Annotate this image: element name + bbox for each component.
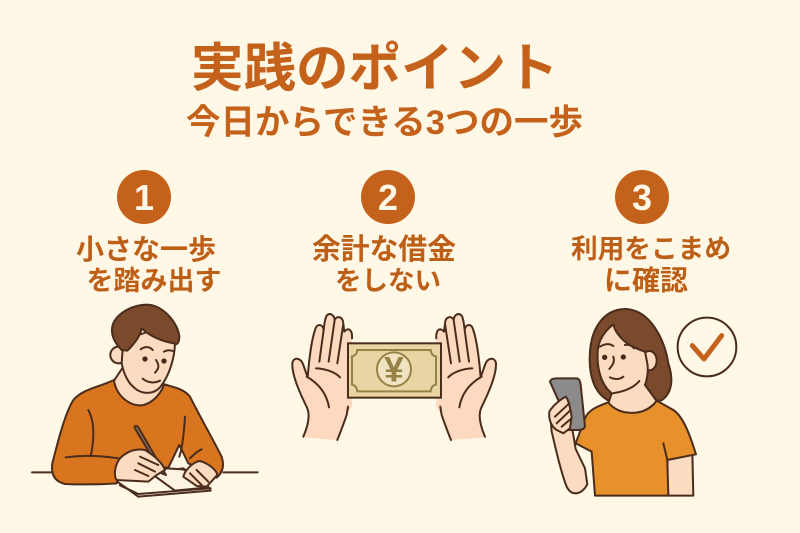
step 3 label [571, 234, 731, 296]
title: 実践のポイント [191, 39, 559, 98]
illustration: man writing in a notebook [32, 305, 258, 497]
banknote [348, 343, 441, 398]
right hand [436, 314, 496, 440]
step 2 number badge: 2 [378, 177, 398, 218]
banknote: ¥ [384, 351, 404, 390]
step 2 number badge [361, 170, 415, 224]
left hand [292, 314, 352, 440]
step 1 number badge: 1 [134, 177, 154, 218]
subtitle: 今日からできる3つの一歩 [186, 104, 583, 142]
step 1 number badge [117, 170, 171, 224]
step 1 label: を踏み出す [86, 266, 222, 296]
icon: check mark in circle [678, 318, 736, 376]
step 2 label [312, 234, 456, 296]
step 3 number badge: 3 [632, 177, 652, 218]
illustration: open hands holding a yen banknote [292, 314, 496, 440]
step 3 label: に確認 [604, 265, 688, 296]
step 2 label: をしない [335, 266, 441, 296]
step 3 label: 利用をこまめ [571, 234, 731, 264]
step 1 label [76, 234, 222, 296]
step 2 label: 余計な借金 [312, 234, 456, 266]
step 1 label: 小さな一歩 [76, 234, 216, 265]
step 3 number badge [615, 170, 669, 224]
illustration: woman checking her smartphone [549, 309, 736, 496]
